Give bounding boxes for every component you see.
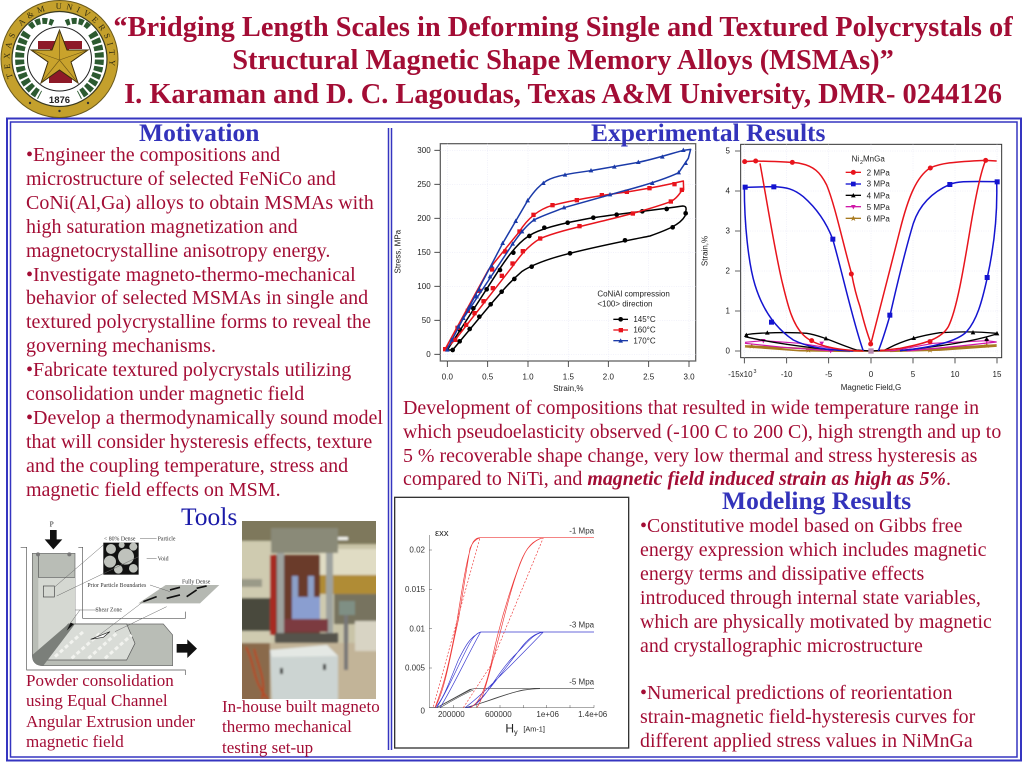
chart: stress vs strain: 1.5: [563, 372, 574, 381]
chart: stress vs strain: 250: [417, 180, 431, 189]
logo: Texas A&M University seal: [0, 0, 118, 118]
text block: experimental results description: [403, 397, 1001, 490]
text block: motivation bullets: microstructure of selected FeNiCo and: [26, 168, 336, 190]
curves: -5 MPa: [429, 688, 594, 708]
caption: powder consolidation: [26, 671, 195, 751]
chart: modeled strain vs field curves: 0.02: [409, 546, 426, 555]
legend: 4 MPa: [867, 191, 890, 200]
text block: motivation bullets: •Engineer the compositions and: [26, 144, 280, 166]
text block: motivation bullets: and the coupling temperature, stress and: [26, 455, 348, 477]
caption: powder consolidation: Angular Extrusion under: [26, 712, 195, 731]
text block: modeling bullets: energy expression which includes magnetic: [640, 539, 987, 561]
legend: 160°C: [633, 326, 656, 335]
chart: modeled strain vs field curves: -5 Mpa: [569, 677, 595, 686]
curves: -1 MPa: [433, 538, 594, 708]
chart: strain vs magnetic field: Magnetic Field,G: [841, 383, 901, 392]
legend: CoNiAl compression: [597, 290, 670, 299]
chart: strain vs magnetic field: -15x10: [728, 370, 753, 379]
legend: 145°C: [633, 315, 656, 324]
chart: modeled strain vs field curves: 0: [421, 707, 426, 716]
title: “Bridging Length Scales in Deforming Single and Textured Polycrystals of: [113, 12, 1013, 42]
caption: in-house set-up: In-house built magneto: [222, 697, 380, 716]
text block: motivation bullets: textured polycrystalline forms to reveal the: [26, 311, 371, 333]
chart: strain vs magnetic field: Strain,%: [701, 236, 710, 266]
text block: motivation bullets: magnetic field effects on MSM.: [26, 479, 281, 501]
text block: motivation bullets: •Fabricate textured polycrystals utilizing: [26, 359, 351, 381]
chart: stress vs strain: 2.0: [603, 372, 614, 381]
legend: MnGa: [863, 155, 885, 164]
legend: 2 MPa: [867, 168, 890, 177]
legend: [597, 290, 670, 346]
legend: 3 MPa: [867, 180, 890, 189]
text block: modeling bullets: introduced through internal state variables,: [640, 587, 981, 609]
chart: stress vs strain: 100: [417, 282, 431, 291]
legend: 5 MPa: [867, 203, 890, 212]
marker cluster at origin: [868, 348, 874, 354]
text block: modeling bullets: [640, 515, 992, 752]
text block: modeling bullets: strain-magnetic field-hysteresis curves for: [640, 706, 975, 728]
chart: modeled strain vs field curves: 600000: [485, 710, 512, 719]
chart: modeled strain vs field curves: 0.015: [405, 585, 426, 594]
legend: 170°C: [633, 337, 656, 346]
chart: modeled strain vs field curves: [394, 496, 630, 749]
chart: stress vs strain: 200: [417, 214, 431, 223]
text block: experimental results description: Development of compositions that resulted in wide temperature range in: [403, 397, 979, 419]
series: 3 MPa: [743, 179, 1000, 351]
chart: strain vs magnetic field: 0: [869, 370, 874, 379]
chart: strain vs magnetic field: 5: [911, 370, 916, 379]
series: 5 MPa: [745, 339, 997, 353]
legend: <100> direction: [597, 300, 652, 309]
series: 2 MPa: [742, 158, 997, 351]
text block: experimental results description: 5 % recoverable shape change, very low thermal and stress hysteresis as: [403, 445, 977, 467]
chart: modeled strain vs field curves: [Am-1]: [523, 725, 545, 734]
text block: motivation bullets: high saturation magnetization and: [26, 216, 298, 238]
chart: stress vs strain: 1.0: [522, 372, 534, 381]
series: 160C: [443, 181, 684, 351]
chart: stress vs strain: 0: [426, 350, 431, 359]
caption: in-house set-up: [222, 697, 380, 757]
chart: strain vs magnetic field: 0: [726, 347, 731, 356]
chart: stress vs strain: 2.5: [643, 372, 655, 381]
series: 4 MPa: [744, 330, 999, 351]
diagram: equal channel angular extrusion: [20, 520, 220, 675]
chart: modeled strain vs field curves: H: [505, 721, 514, 735]
chart: stress vs strain: [393, 143, 696, 393]
text block: modeling bullets: which are physically motivated by magnetic: [640, 611, 992, 633]
chart: strain vs magnetic field: 3: [726, 227, 731, 236]
chart: modeled strain vs field curves: y: [514, 727, 518, 736]
heading: Experimental Results: Experimental Results: [591, 118, 825, 147]
title: [113, 12, 1013, 110]
chart: stress vs strain: 150: [417, 248, 431, 257]
heading: Motivation: Motivation: [139, 118, 259, 147]
curves: -3 MPa: [435, 632, 594, 708]
diagram: equal channel angular extrusion: Particle: [158, 537, 176, 543]
chart: modeled strain vs field curves: 1e+06: [536, 710, 559, 719]
series: 6 MPa: [745, 343, 997, 353]
text block: experimental results description: compared to NiTi, and magnetic field induced strain as high as 5%.: [403, 468, 951, 490]
legend: 6 MPa: [867, 214, 890, 223]
caption: in-house set-up: thermo mechanical: [222, 717, 352, 736]
legend: [846, 155, 890, 223]
photo: testing set-up: [242, 521, 376, 699]
caption: in-house set-up: testing set-up: [222, 738, 313, 757]
chart: strain vs magnetic field: 4: [726, 187, 731, 196]
diagram: equal channel angular extrusion: Shear Zone: [95, 607, 122, 613]
text block: motivation bullets: •Investigate magneto-thermo-mechanical: [26, 264, 356, 286]
diagram: equal channel angular extrusion: < 80% Dense: [104, 537, 136, 543]
title: Structural Magnetic Shape Memory Alloys (MSMAs)”: [232, 45, 894, 76]
chart: strain vs magnetic field: 3: [754, 369, 757, 375]
chart: modeled strain vs field curves: 0.01: [409, 624, 426, 633]
chart: strain vs magnetic field: 5: [726, 147, 731, 156]
logo: Texas A&M University seal: TEXAS A&M UNIVERSITY: [4, 3, 116, 80]
series: 145C: [447, 206, 688, 352]
chart: modeled strain vs field curves: -1 Mpa: [569, 526, 595, 535]
chart: modeled strain vs field curves: -3 Mpa: [569, 620, 595, 629]
chart: stress vs strain: 0.5: [482, 372, 494, 381]
text block: modeling bullets: •Numerical predictions of reorientation: [640, 682, 952, 704]
text block: motivation bullets: behavior of selected MSMAs in single and: [26, 287, 368, 309]
logo: Texas A&M University seal: 1876: [49, 95, 70, 106]
chart: strain vs magnetic field: 1: [726, 307, 731, 316]
chart: strain vs magnetic field: 10: [951, 370, 960, 379]
chart: strain vs magnetic field: 15: [993, 370, 1002, 379]
text block: motivation bullets: that will consider hysteresis effects, texture: [26, 431, 372, 453]
chart: strain vs magnetic field: 2: [726, 267, 731, 276]
text block: modeling bullets: •Constitutive model based on Gibbs free: [640, 515, 962, 537]
diagram: equal channel angular extrusion: Fully Dense: [182, 579, 211, 585]
caption: powder consolidation: using Equal Channel: [26, 691, 168, 710]
chart: stress vs strain: 3.0: [683, 372, 695, 381]
title: I. Karaman and D. C. Lagoudas, Texas A&M University, DMR- 0244126: [124, 78, 1002, 110]
text block: modeling bullets: and crystallographic microstructure: [640, 635, 923, 657]
chart: strain vs magnetic field: -5: [825, 370, 833, 379]
chart: stress vs strain: Stress, MPa: [393, 229, 402, 273]
text block: motivation bullets: [26, 144, 383, 501]
text block: motivation bullets: governing mechanisms.: [26, 335, 216, 357]
heading: Tools: Tools: [181, 502, 237, 531]
heading: Modeling Results: Modeling Results: [722, 486, 911, 515]
chart: stress vs strain: 0.0: [442, 372, 453, 381]
text block: motivation bullets: consolidation under magnetic field: [26, 383, 304, 405]
chart: stress vs strain: Strain,%: [553, 384, 583, 393]
chart: modeled strain vs field curves: 0.005: [405, 664, 426, 673]
caption: powder consolidation: magnetic field: [26, 732, 124, 751]
diagram: equal channel angular extrusion: P: [50, 520, 54, 529]
chart: modeled strain vs field curves: εxx: [435, 528, 449, 538]
chart: stress vs strain: 50: [422, 316, 431, 325]
diagram: equal channel angular extrusion: Void: [158, 557, 169, 563]
text block: modeling bullets: energy terms and dissipative effects: [640, 563, 924, 585]
legend: Ni: [852, 155, 859, 164]
chart: modeled strain vs field curves: 200000: [438, 710, 465, 719]
chart: stress vs strain: 300: [417, 146, 431, 155]
chart: modeled strain vs field curves: 1.4e+06: [578, 710, 608, 719]
chart: strain vs magnetic field: -10: [781, 370, 793, 379]
text block: motivation bullets: CoNi(Al,Ga) alloys to obtain MSMAs with: [26, 192, 374, 214]
chart: strain vs magnetic field: [701, 144, 1002, 392]
text block: motivation bullets: magnetocrystalline anisotropy energy.: [26, 240, 330, 262]
legend: 2: [860, 160, 863, 166]
text block: experimental results description: which pseudoelasticity observed (-100 C to 200 C), high strength and up to: [403, 421, 1001, 443]
caption: powder consolidation: Powder consolidation: [26, 671, 174, 690]
text block: modeling bullets: different applied stress values in NiMnGa: [640, 730, 973, 752]
diagram: equal channel angular extrusion: Prior Particle Boundaries: [87, 583, 147, 589]
text block: motivation bullets: •Develop a thermodynamically sound model: [26, 407, 383, 429]
series: 170C: [445, 148, 691, 352]
